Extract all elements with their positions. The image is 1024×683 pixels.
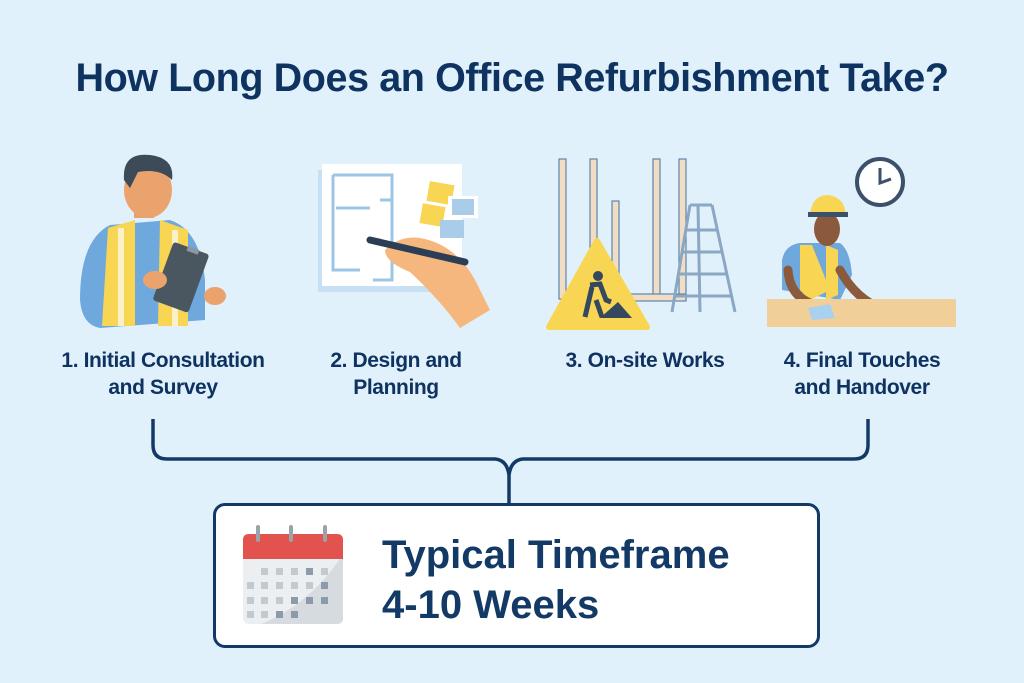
bracket connector (151, 419, 870, 503)
text: typical timeframe: 4-10 Weeks (382, 583, 599, 627)
label: step 4 (784, 349, 940, 399)
text: typical timeframe (382, 533, 730, 627)
label: step 3: 3. On-site Works (566, 349, 724, 372)
label: step 2: Planning (353, 376, 439, 399)
label: step 1: and Survey (108, 376, 218, 399)
icon: construction site (546, 158, 736, 330)
icon: worker finishing with clock (767, 157, 956, 327)
label: step 2: 2. Design and (330, 349, 462, 372)
timeframe box (213, 503, 820, 648)
text: typical timeframe: Typical Timeframe (382, 533, 730, 577)
label: step 4: 4. Final Touches (784, 349, 940, 372)
label: step 1 (61, 349, 265, 399)
label: step 4: and Handover (794, 376, 930, 399)
title: How Long Does an Office Refurbishment Take? (75, 56, 949, 100)
label: step 2 (330, 349, 462, 399)
icon: floor plan and hand with pen (318, 164, 490, 328)
label: step 1: 1. Initial Consultation (61, 349, 265, 372)
icon: calendar (243, 525, 343, 624)
icon: surveyor with clipboard (80, 154, 226, 328)
